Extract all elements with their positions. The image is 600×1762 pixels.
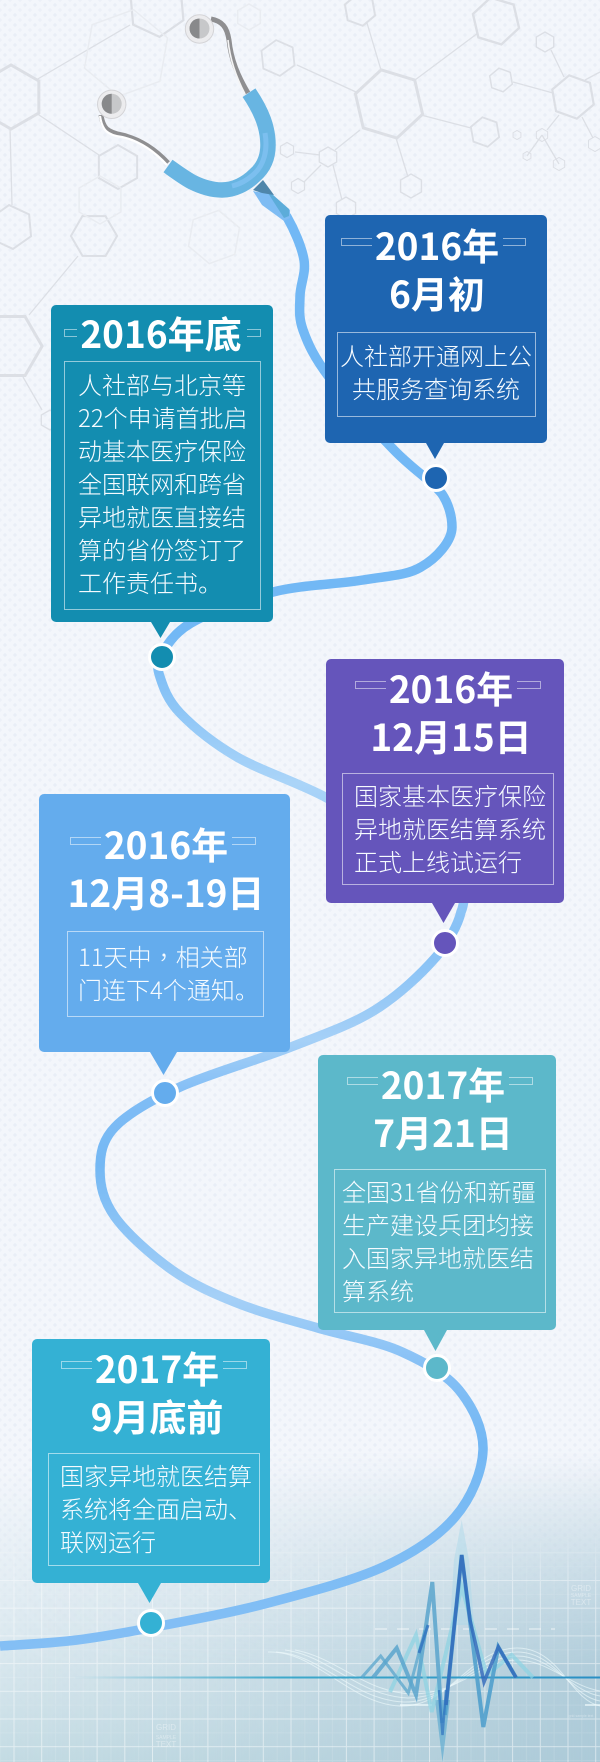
text block: 异地就医直接结: [78, 498, 246, 533]
dot: 2017年7月21日: [423, 1354, 451, 1382]
heading ornament left: [64, 329, 77, 337]
text frame: [334, 1169, 546, 1313]
dot: 2016年12月15日: [431, 929, 459, 957]
text frame: [64, 361, 261, 610]
text block: 异地就医结算系统: [354, 810, 546, 845]
heading: 2016年底: [80, 305, 242, 359]
heading ornament right: [517, 681, 541, 689]
heading: [375, 217, 499, 319]
text block: 联网运行: [60, 1523, 156, 1558]
heading: 12月8-19日: [68, 864, 264, 918]
text block: 共服务查询系统: [352, 370, 520, 404]
heading: [68, 816, 264, 918]
panel: 2016年12月15日: [326, 659, 564, 903]
text block: [60, 1457, 252, 1558]
ECG small sample text: grid sample text: [569, 1714, 593, 1718]
heading: 2017年: [381, 1056, 505, 1110]
text block: 全国联网和跨省: [78, 465, 246, 500]
molecular hexagon network: [0, 0, 600, 430]
heading ornament right: [509, 1077, 533, 1085]
heading ornament right: [503, 238, 526, 246]
text block: 全国31省份和新疆: [342, 1173, 536, 1208]
text block: 人社部开通网上公: [340, 336, 532, 372]
pointer: [432, 903, 455, 923]
pointer: [138, 1583, 161, 1603]
pointer: [426, 443, 444, 459]
heading: [370, 660, 532, 762]
heading ornament left: [341, 238, 372, 246]
heading ornament left: [355, 681, 386, 689]
heading: 9月底前: [91, 1388, 223, 1442]
ECG small sample text: GRID: [571, 1584, 591, 1593]
stethoscope ear tip left: [98, 90, 126, 119]
pointer: [151, 622, 170, 638]
text frame: [337, 332, 536, 417]
text frame: [67, 931, 264, 1017]
ECG small sample text: [156, 1584, 593, 1749]
heading: [91, 1340, 223, 1442]
text frame: [48, 1453, 260, 1566]
dot: 2016年6月初: [422, 464, 450, 492]
ECG small sample text: GRID: [156, 1723, 176, 1732]
stethoscope metal tube left: [100, 115, 168, 165]
text block: 系统将全面启动、: [60, 1490, 252, 1525]
heading: 2016年: [389, 660, 513, 714]
heading ornament left: [70, 837, 101, 845]
text block: 算系统: [342, 1272, 414, 1307]
heading ornament right: [223, 1361, 247, 1369]
text block: [354, 777, 546, 878]
dot: 2016年底: [148, 643, 176, 671]
heading: [373, 1056, 513, 1158]
text block: 算的省份签订了: [78, 531, 246, 566]
panel: 2016年底: [51, 305, 273, 622]
text block: 22个申请首批启: [78, 399, 248, 434]
heading ornament left: [61, 1361, 92, 1369]
ECG sine waves: [268, 1648, 600, 1706]
heading ornament right: [247, 329, 261, 337]
text block: [340, 336, 532, 404]
heading: 7月21日: [373, 1104, 513, 1158]
text block: 国家基本医疗保险: [354, 777, 546, 812]
panel: 2016年6月初: [325, 215, 547, 443]
dot: 2017年9月底前: [137, 1609, 165, 1637]
panel: 2017年9月底前: [32, 1339, 270, 1583]
ECG small sample text: TEXT: [571, 1598, 591, 1607]
heading: 6月初: [389, 265, 485, 319]
heading: 2016年: [104, 816, 228, 870]
text block: 国家异地就医结算: [60, 1457, 252, 1492]
text block: 入国家异地就医结: [342, 1239, 534, 1274]
panel: 2016年12月8-19日: [39, 794, 290, 1052]
pointer: [424, 1330, 447, 1351]
ECG grid: [0, 1530, 600, 1762]
stethoscope junction stem: [253, 180, 290, 221]
ECG small sample text: SAMPLE: [571, 1593, 592, 1599]
text block: [78, 366, 248, 599]
stethoscope ear tip right: [185, 15, 214, 43]
ECG heartbeat trace: [75, 1520, 600, 1762]
text block: 门连下4个通知。: [78, 971, 259, 1006]
heading ornament left: [347, 1077, 378, 1085]
text frame: [342, 773, 554, 885]
text block: 动基本医疗保险: [78, 432, 246, 467]
stethoscope metal tube right: [211, 19, 248, 94]
text block: [342, 1173, 536, 1307]
text block: 正式上线试运行: [354, 843, 522, 878]
heading ornament right: [232, 837, 256, 845]
faint background hexagons: [79, 3, 260, 268]
heading: 12月15日: [370, 708, 532, 762]
ECG small sample text: SAMPLE: [156, 1735, 177, 1741]
ECG small sample text: TEXT: [156, 1740, 176, 1749]
pointer: [150, 1052, 177, 1075]
text block: 生产建设兵团均接: [342, 1206, 534, 1241]
text block: 工作责任书。: [78, 564, 222, 599]
text block: 11天中，相关部: [78, 938, 248, 973]
text block: [78, 938, 259, 1006]
text block: 人社部与北京等: [78, 366, 246, 401]
dot: 2016年12月8-19日: [151, 1079, 179, 1107]
heading: 2017年: [95, 1340, 219, 1394]
icon: stethoscope: [98, 15, 290, 221]
heading: 2016年: [375, 217, 499, 271]
bottom tinted gradient: [0, 1450, 600, 1762]
stethoscope U tube: [168, 93, 268, 190]
timeline winding path: [0, 190, 483, 1646]
ECG dashed threshold line: [375, 1628, 555, 1630]
panel: 2017年7月21日: [318, 1055, 556, 1330]
